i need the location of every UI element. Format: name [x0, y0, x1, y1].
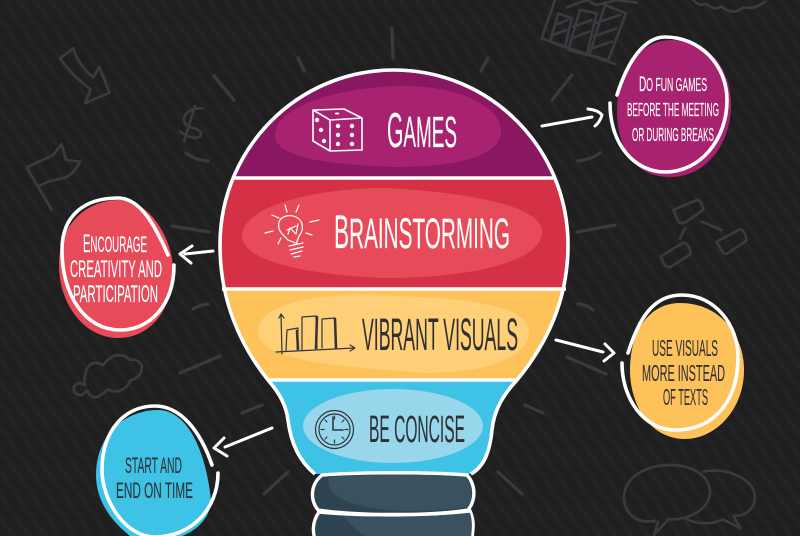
callout: brainstorming: PARTICIPATION: [73, 281, 158, 308]
callout: be concise: END ON TIME: [116, 478, 193, 503]
bulb outline: [220, 70, 568, 474]
bulb band: be concise: [272, 382, 514, 474]
doodle: dollar sign: [180, 106, 203, 142]
bulb band: vibrant visuals: [226, 290, 561, 378]
socket ring lower: [313, 511, 473, 536]
callout: brainstorming: CREATIVITY AND: [70, 256, 162, 283]
callout: brainstorming: [59, 198, 174, 338]
heading: be concise: [316, 409, 465, 451]
callout: be concise: [96, 406, 218, 536]
arrow: to be concise callout: [214, 428, 272, 456]
callout: be concise: START AND: [125, 453, 182, 478]
callout: games: [610, 37, 731, 177]
bulb band: games: [236, 72, 552, 176]
icon: bar chart: [276, 314, 355, 354]
callout: brainstorming: ENCOURAGE: [83, 230, 147, 258]
arrow: to games callout: [542, 109, 602, 126]
callout: vibrant visuals: [622, 295, 744, 439]
socket: [312, 473, 474, 536]
bulb: [218, 68, 570, 476]
icon: light bulb: [265, 205, 319, 257]
decorative rays around bulb: [172, 28, 615, 494]
doodle: bar chart top right: [542, 0, 637, 64]
doodle: arrow: [60, 48, 109, 103]
callout: vibrant visuals: OF TEXTS: [663, 384, 708, 410]
doodle: flow chart: [661, 200, 747, 267]
label: BRAINSTORMING: [334, 205, 510, 258]
doodle: cloud left: [74, 355, 142, 397]
text: VIBRANT VISUALS: [362, 309, 518, 360]
arrow: to brainstorming callout: [180, 246, 213, 263]
doodle: cloud top right: [693, 0, 765, 12]
icon: clock: [316, 410, 354, 448]
callout: games: DO FUN GAMES: [639, 73, 707, 96]
heading: vibrant visuals: [276, 309, 518, 360]
band dividers: [222, 178, 566, 380]
doodle: speech bubbles: [624, 465, 755, 535]
heading: games: [313, 104, 457, 158]
bulb band: brainstorming: [222, 180, 566, 288]
heading: brainstorming: [265, 205, 510, 258]
text: BE CONCISE: [369, 409, 465, 451]
text: GAMES: [387, 104, 457, 158]
callout: vibrant visuals: USE VISUALS: [652, 335, 718, 361]
icon: dice: [313, 109, 362, 151]
arrow: to vibrant visuals callout: [556, 340, 614, 361]
doodle: flag: [27, 144, 80, 210]
socket ring upper: [312, 473, 474, 514]
